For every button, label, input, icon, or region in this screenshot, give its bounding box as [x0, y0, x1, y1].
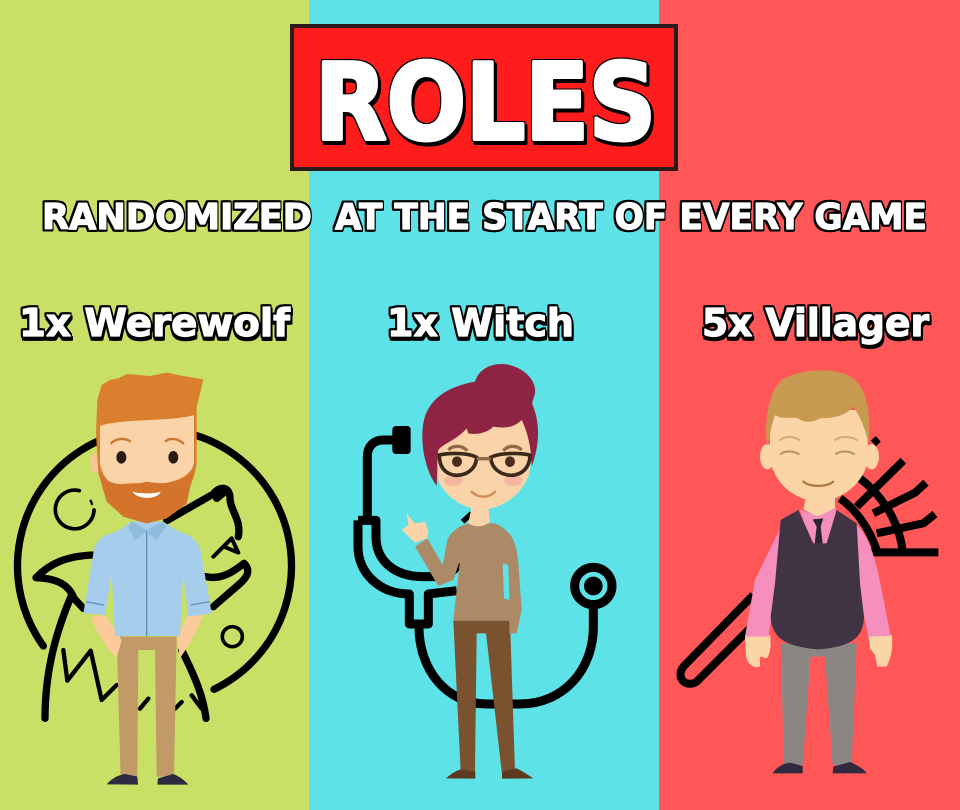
face — [437, 417, 531, 509]
hands — [745, 635, 892, 667]
shirt — [83, 522, 212, 636]
neck and collar — [803, 493, 835, 517]
ear — [90, 453, 100, 473]
character: witch — [402, 364, 538, 779]
arms — [91, 613, 203, 658]
icon: stethoscope — [358, 426, 612, 704]
shoes — [773, 762, 867, 773]
sleeves — [745, 525, 891, 637]
smile — [133, 492, 161, 498]
panel: witch background — [309, 0, 659, 810]
tie — [813, 518, 823, 543]
neck — [468, 507, 490, 526]
eyes — [452, 456, 462, 467]
label: werewolf: 1x Werewolf — [19, 301, 290, 345]
character: villager — [745, 370, 892, 773]
face — [770, 410, 868, 502]
trousers — [117, 637, 177, 777]
panel: werewolf background — [0, 0, 309, 810]
title banner: ROLES — [315, 42, 656, 164]
label: villager: 5x Villager — [702, 301, 929, 345]
character: werewolf man — [83, 373, 212, 785]
label: witch: 1x Witch — [387, 301, 574, 345]
face — [100, 415, 194, 485]
hand — [402, 513, 428, 543]
top — [415, 523, 522, 633]
icon: werewolf emblem — [17, 429, 291, 718]
eyes — [116, 451, 126, 464]
hair — [766, 370, 869, 447]
hair — [422, 364, 538, 486]
icon: broom — [680, 438, 938, 684]
glasses and brows — [439, 453, 530, 475]
trousers — [453, 621, 515, 772]
hair and beard — [96, 373, 203, 523]
panel: villager background — [659, 0, 960, 810]
subtitle: AT THE START OF EVERY GAME — [335, 197, 927, 238]
smile — [803, 482, 833, 486]
subtitle: RANDOMIZED — [42, 197, 312, 238]
cheeks — [444, 475, 463, 486]
smile — [472, 492, 495, 497]
vest — [771, 510, 864, 649]
trousers — [781, 643, 857, 765]
brows — [111, 439, 184, 444]
shoes — [446, 768, 533, 779]
eyes and brows — [780, 437, 857, 440]
subtitle — [42, 197, 927, 238]
shoes — [107, 774, 188, 785]
ears — [760, 444, 775, 469]
